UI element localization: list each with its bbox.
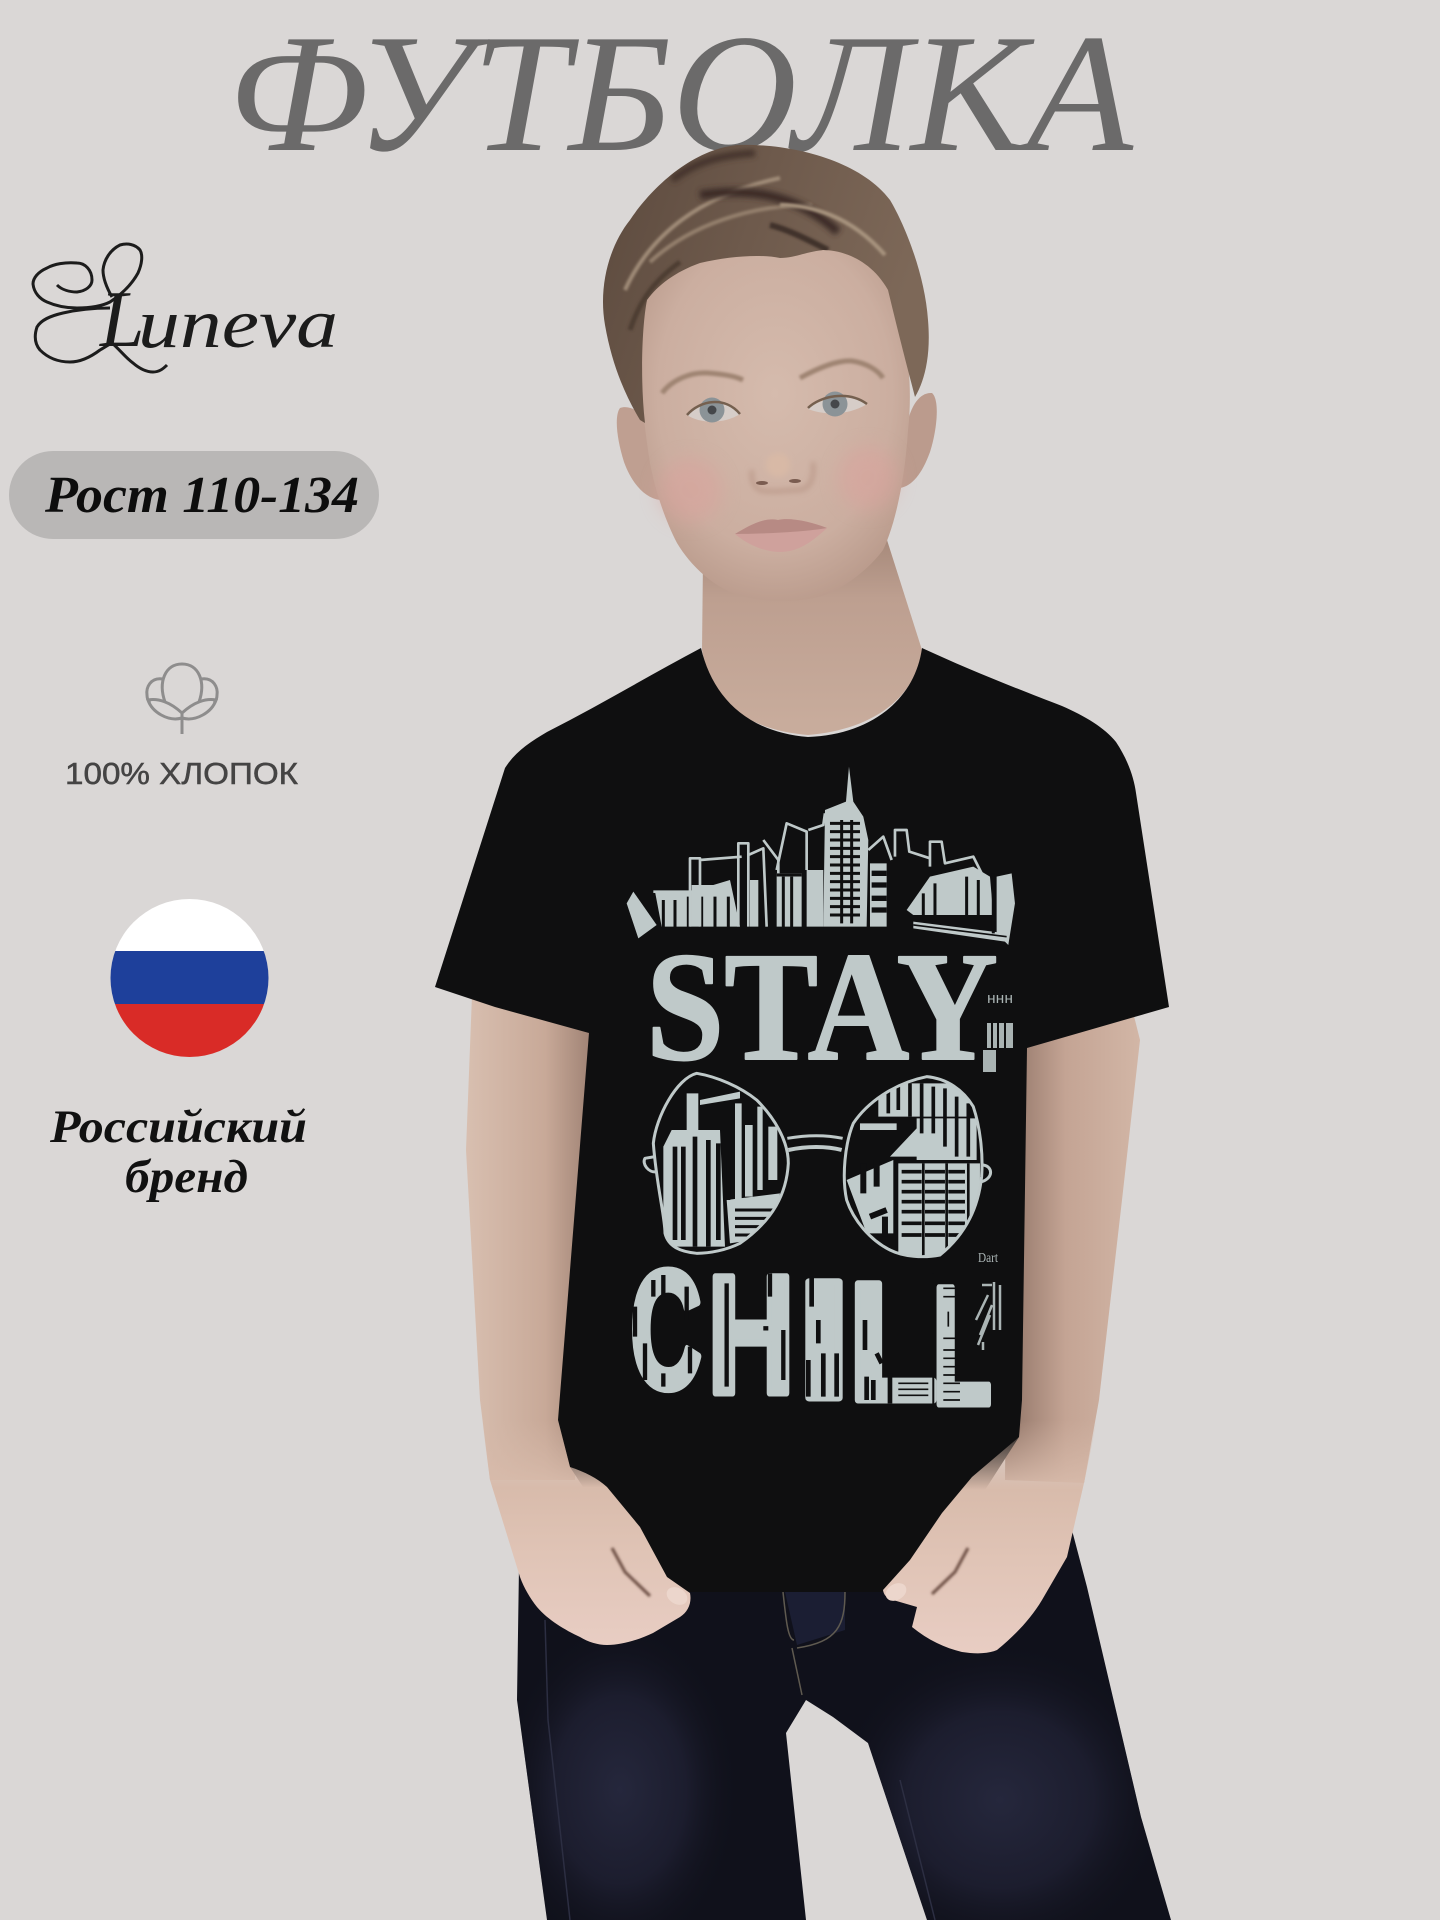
finger creases [612,1548,968,1596]
neck [702,540,922,735]
small print art [976,1282,1000,1350]
left arm [466,995,610,1480]
icon: cotton boll [147,664,217,734]
thumbnails [663,1580,910,1608]
brand label: бренд [125,1151,248,1203]
height pill [9,451,379,539]
ears [617,393,937,500]
icon: russian flag [110,899,270,1058]
face [640,243,910,601]
sunglasses [644,1073,991,1257]
CHILL lettering: L [932,1251,992,1440]
right hand [883,1420,1097,1653]
CHILL lettering: C [630,1235,702,1424]
cotton label: 100% ХЛОПОК [65,756,298,791]
eyebrows [662,373,743,393]
hair [603,145,929,423]
t-shirt [435,648,1169,1592]
logo: Luneva: uneva [138,286,338,363]
skyline [627,767,1015,945]
title: ФУТБОЛКА [228,0,1134,187]
CHILL lettering: I [796,1245,852,1434]
hair strands [625,153,885,330]
eyes [687,392,867,422]
logo: Luneva [33,244,338,372]
print side marks: Dart [978,1251,998,1266]
t-shirt print [627,767,1015,1440]
print side marks [978,993,1013,1266]
lips [735,519,827,552]
CHILL lettering: H [707,1240,795,1429]
nose [752,453,813,491]
print side marks: HHH [987,993,1013,1007]
right arm [1005,1000,1140,1483]
brand label: Российский [49,1101,307,1153]
STAY lettering: STAY [646,920,998,1093]
logo: Luneva: L [99,276,144,364]
CHILL lettering [630,1235,992,1440]
left hand [482,1420,691,1645]
CHILL hatching [635,1273,960,1407]
jeans [517,1532,1171,1920]
brand label [49,1101,307,1203]
boy model [435,145,1171,1920]
height pill: Рост 110-134 [44,467,359,524]
CHILL lettering: L [848,1247,938,1436]
cheeks [658,446,898,522]
